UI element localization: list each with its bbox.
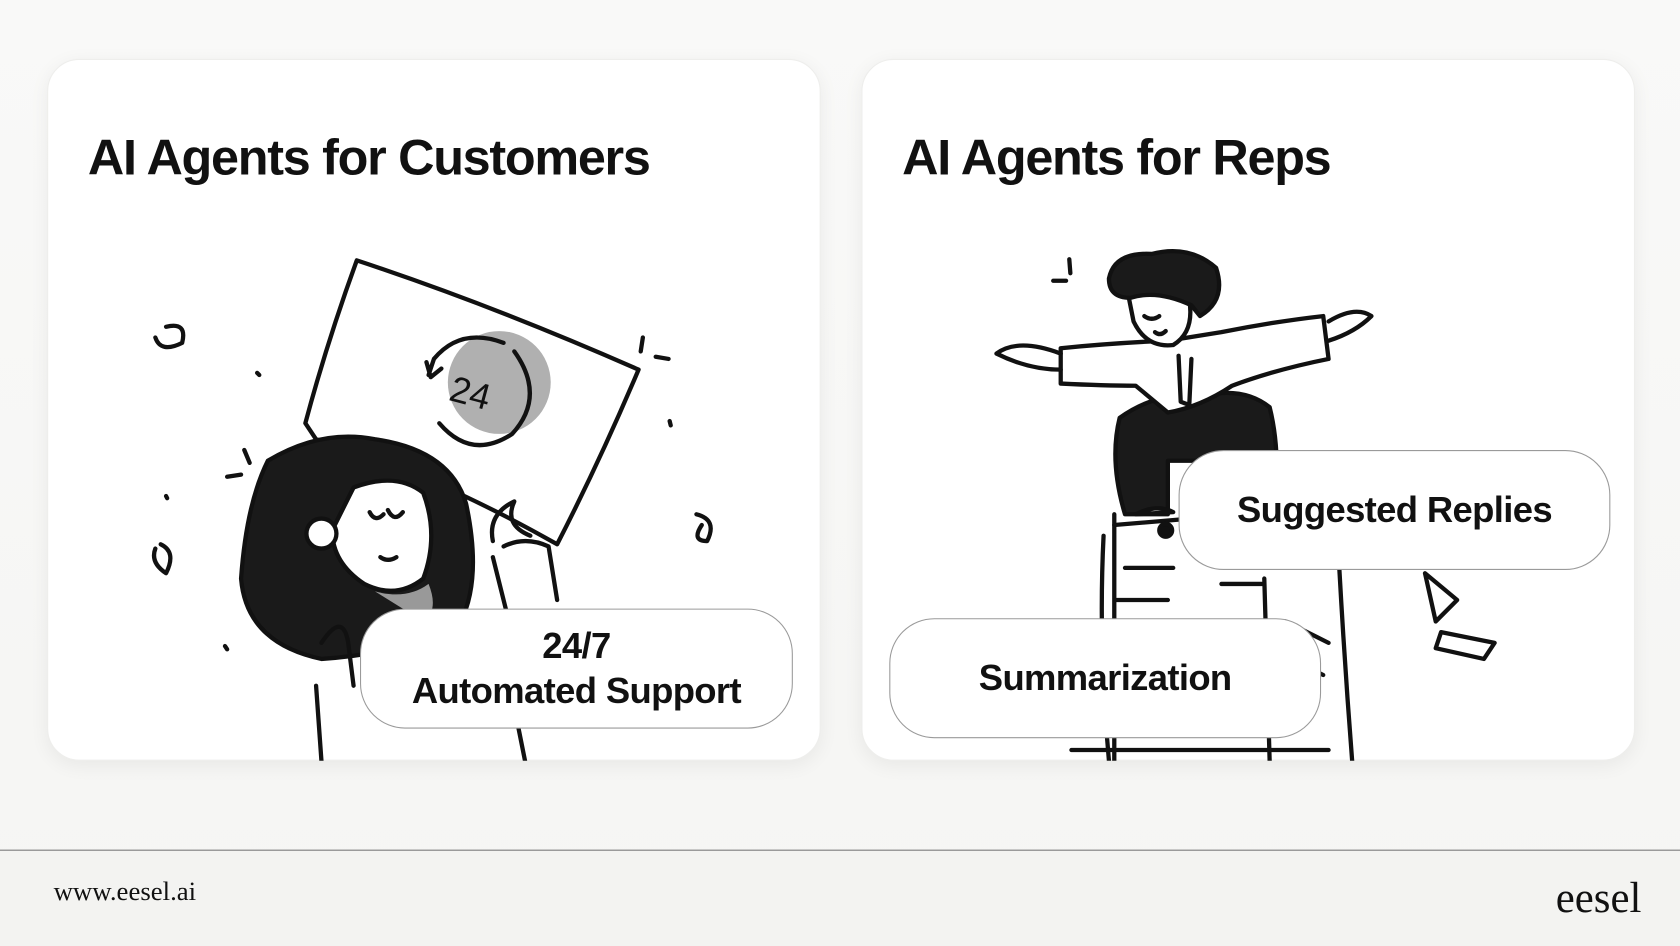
callout: suggested replies	[1179, 450, 1610, 570]
footer logo: eesel	[1556, 873, 1641, 921]
title: customers: AI Agents for Customers	[88, 129, 650, 185]
title: reps: AI Agents for Reps	[902, 129, 1330, 185]
illustration: woman with 24 pillow: 24	[446, 368, 495, 418]
callout: summarization	[889, 618, 1321, 738]
callout: 24/7 automated support: Automated Support	[412, 671, 741, 711]
callout: suggested replies: Suggested Replies	[1237, 490, 1552, 530]
panel: customers	[47, 59, 821, 761]
callout: 24/7 automated support: 24/7	[542, 626, 611, 666]
callout: summarization: Summarization	[979, 658, 1232, 699]
callout: 24/7 automated support	[360, 609, 793, 729]
panel: reps	[861, 59, 1635, 761]
footer url: www.eesel.ai	[54, 878, 196, 906]
illustration: man skating on papers	[996, 251, 1495, 761]
footer	[0, 850, 1680, 946]
illustration: woman with 24 pillow	[154, 260, 711, 761]
